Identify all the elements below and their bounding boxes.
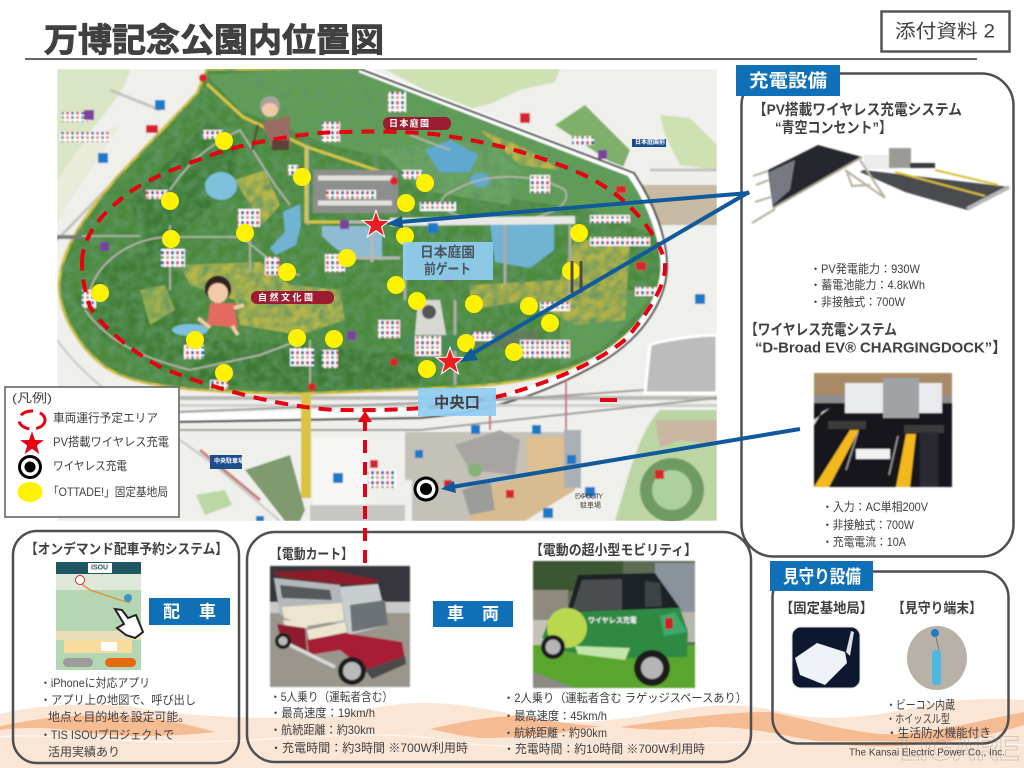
specs: electric cart: ・航続距離：約30km — [270, 722, 375, 737]
specs: terminal: ・ビーコン内蔵 — [886, 698, 955, 712]
map zone pills: 日本庭園 — [389, 118, 429, 128]
background wave — [0, 699, 1024, 768]
specs: terminal: ・ホイッスル型 — [886, 712, 950, 726]
panel: dispatch — [13, 531, 239, 763]
specs: PV system: ・蓄電池能力：4.8kWh — [810, 278, 925, 292]
arrow: PV system to north star — [386, 193, 749, 228]
map zone pills: 自然文化園 — [258, 292, 313, 302]
olive fields — [180, 262, 345, 335]
map small labels: 中央駐車場 — [214, 457, 244, 465]
specs: wireless system — [822, 500, 928, 549]
map zone pills — [251, 117, 451, 304]
tab: monitoring equipment: 見守り設備 — [783, 567, 861, 587]
label: dispatch — [149, 598, 230, 625]
specs: dispatch — [40, 676, 196, 759]
ponds — [205, 172, 237, 200]
character: running girl — [198, 276, 244, 335]
heading: wireless system: “D-Broad EV® CHARGINGDOCK”】 — [755, 340, 1007, 356]
heading: PV wireless system — [753, 100, 962, 136]
specs: compact EV: ・充電時間：約10時間 ※700W利用時 — [503, 741, 705, 756]
specs: electric cart — [270, 690, 468, 755]
heading: monitoring terminal: 【見守り端末】 — [892, 600, 982, 616]
gray roads — [57, 130, 566, 385]
specs: wireless system: ・非接触式：700W — [822, 517, 915, 532]
specs: PV system — [810, 262, 925, 309]
gate label: central entrance — [418, 388, 496, 416]
gate label: Japanese garden front gate — [403, 242, 493, 280]
photo: electric cart — [270, 566, 410, 687]
heading: fixed base station: 【固定基地局】 — [780, 600, 873, 616]
panel: monitoring equipment — [770, 561, 1008, 744]
heading: wireless system: 【ワイヤレス充電システム — [745, 322, 897, 338]
heading: wireless system — [745, 322, 1007, 356]
specs: wireless system: ・充電電流：10A — [822, 535, 906, 549]
panel: charging equipment — [736, 65, 1014, 556]
star: PV wireless charger north — [362, 210, 390, 237]
icon: pointing hand — [115, 609, 143, 638]
gate label: central entrance: 中央口 — [434, 394, 480, 412]
forest texture — [58, 69, 660, 394]
map small labels: 駐車場 — [580, 500, 601, 510]
legend: PV star: PV搭載ワイヤレス充電 — [53, 435, 169, 449]
photo: base station device — [792, 627, 860, 688]
specs: electric cart: ・充電時間：約3時間 ※700W利用時 — [270, 740, 468, 755]
legend: wireless — [18, 455, 127, 479]
below park regions — [245, 455, 305, 521]
map — [57, 69, 720, 522]
heading: ultra-compact mobility: 【電動の超小型モビリティ】 — [530, 542, 697, 558]
specs: dispatch: ・TIS ISOUプロジェクトで — [40, 728, 174, 742]
tab: monitoring equipment — [770, 561, 873, 591]
gate label: Japanese garden front gate: 日本庭園 — [420, 244, 475, 260]
legend: route — [19, 411, 158, 429]
route: vehicle operating area — [82, 132, 665, 410]
tower of the sun — [414, 298, 448, 336]
pictogram blocks — [60, 92, 657, 488]
central building — [313, 170, 398, 213]
arrow: PV system to south star — [460, 192, 749, 362]
target: wireless charger — [414, 476, 438, 502]
app screenshot: ISOU — [91, 564, 108, 572]
parking icons — [98, 100, 705, 521]
park ground — [59, 69, 662, 394]
specs: compact EV: ・2人乗り（運転者含む ラゲッジスペースあり） — [503, 691, 747, 705]
label: vehicles — [433, 601, 513, 627]
specs: wireless system: ・入力：AC単相200V — [822, 500, 928, 514]
legend: PV star — [20, 431, 169, 454]
heading: PV wireless system: “青空コンセント”】 — [775, 118, 892, 136]
character: grandmother — [252, 96, 290, 150]
legend: wireless: ワイヤレス充電 — [53, 459, 127, 473]
photo: compact EV: ワイヤレス充電 — [588, 616, 637, 624]
specs: PV system: ・PV発電能力：930W — [810, 262, 921, 276]
specs: dispatch: ・アプリ上の地図で、呼び出し — [40, 693, 196, 707]
photo: compact EV — [533, 561, 695, 688]
attachment label — [882, 12, 1010, 52]
app screenshot — [56, 562, 143, 670]
specs: electric cart: ・5人乗り（運転者含む） — [270, 690, 393, 704]
specs: electric cart: ・最高速度：19km/h — [270, 706, 375, 720]
legend: base station — [18, 482, 168, 502]
specs: dispatch: 活用実績あり — [48, 744, 120, 759]
stray route dash — [600, 398, 617, 402]
heading: PV wireless system: 【PV搭載ワイヤレス充電システム — [753, 100, 962, 118]
specs: compact EV — [503, 691, 747, 756]
specs: dispatch: ・iPhoneに対応アプリ — [40, 676, 150, 690]
map red signs — [146, 113, 664, 498]
yellow base stations — [91, 132, 588, 382]
gate label: Japanese garden front gate: 前ゲート — [424, 261, 471, 277]
photo: charging dock — [814, 373, 952, 487]
photo: monitoring terminal — [907, 626, 967, 690]
label: vehicles: 車 両 — [447, 604, 499, 624]
label: dispatch: 配 車 — [163, 602, 216, 622]
specs: terminal — [886, 698, 991, 740]
map small labels: EXPOCITY — [575, 494, 603, 500]
tab: charging equipment — [736, 65, 840, 96]
legend: base station: 「OTTADE!」固定基地局 — [48, 485, 168, 499]
railway and outside — [180, 69, 666, 421]
route spur arrow — [358, 411, 372, 422]
specs: dispatch: 地点と目的地を設定可能。 — [48, 709, 190, 724]
map small labels: 日本庭園前 — [635, 138, 665, 146]
map small labels — [210, 138, 666, 510]
footer copyright: The Kansai Electric Power Co., Inc. — [849, 748, 1005, 758]
legend title: (凡例) — [12, 391, 52, 405]
purple smoking icons — [84, 110, 607, 340]
attachment label: 添付資料 2 — [895, 20, 995, 42]
heading: electric cart: 【電動カート】 — [270, 546, 353, 562]
specs: PV system: ・非接触式：700W — [810, 294, 906, 309]
title: 万博記念公園内位置図 — [44, 22, 384, 58]
specs: terminal: ・生活防水機能付き — [886, 725, 991, 740]
route spur to vehicle panel — [363, 422, 367, 563]
legend: route: 車両運行予定エリア — [53, 411, 158, 425]
heading: on-demand dispatch: 【オンデマンド配車予約システム】 — [25, 541, 228, 557]
gold road — [205, 82, 380, 171]
specs: compact EV: ・航続距離：約90km — [503, 725, 607, 740]
arrow: wireless system to target — [441, 429, 800, 493]
specs: compact EV: ・最高速度：45km/h — [503, 709, 607, 723]
tab: charging equipment: 充電設備 — [749, 71, 827, 91]
legend — [5, 387, 179, 517]
star: PV wireless charger south — [436, 347, 464, 374]
photo: solar panel with charging mat — [752, 145, 1010, 223]
panel: vehicles — [247, 532, 751, 762]
